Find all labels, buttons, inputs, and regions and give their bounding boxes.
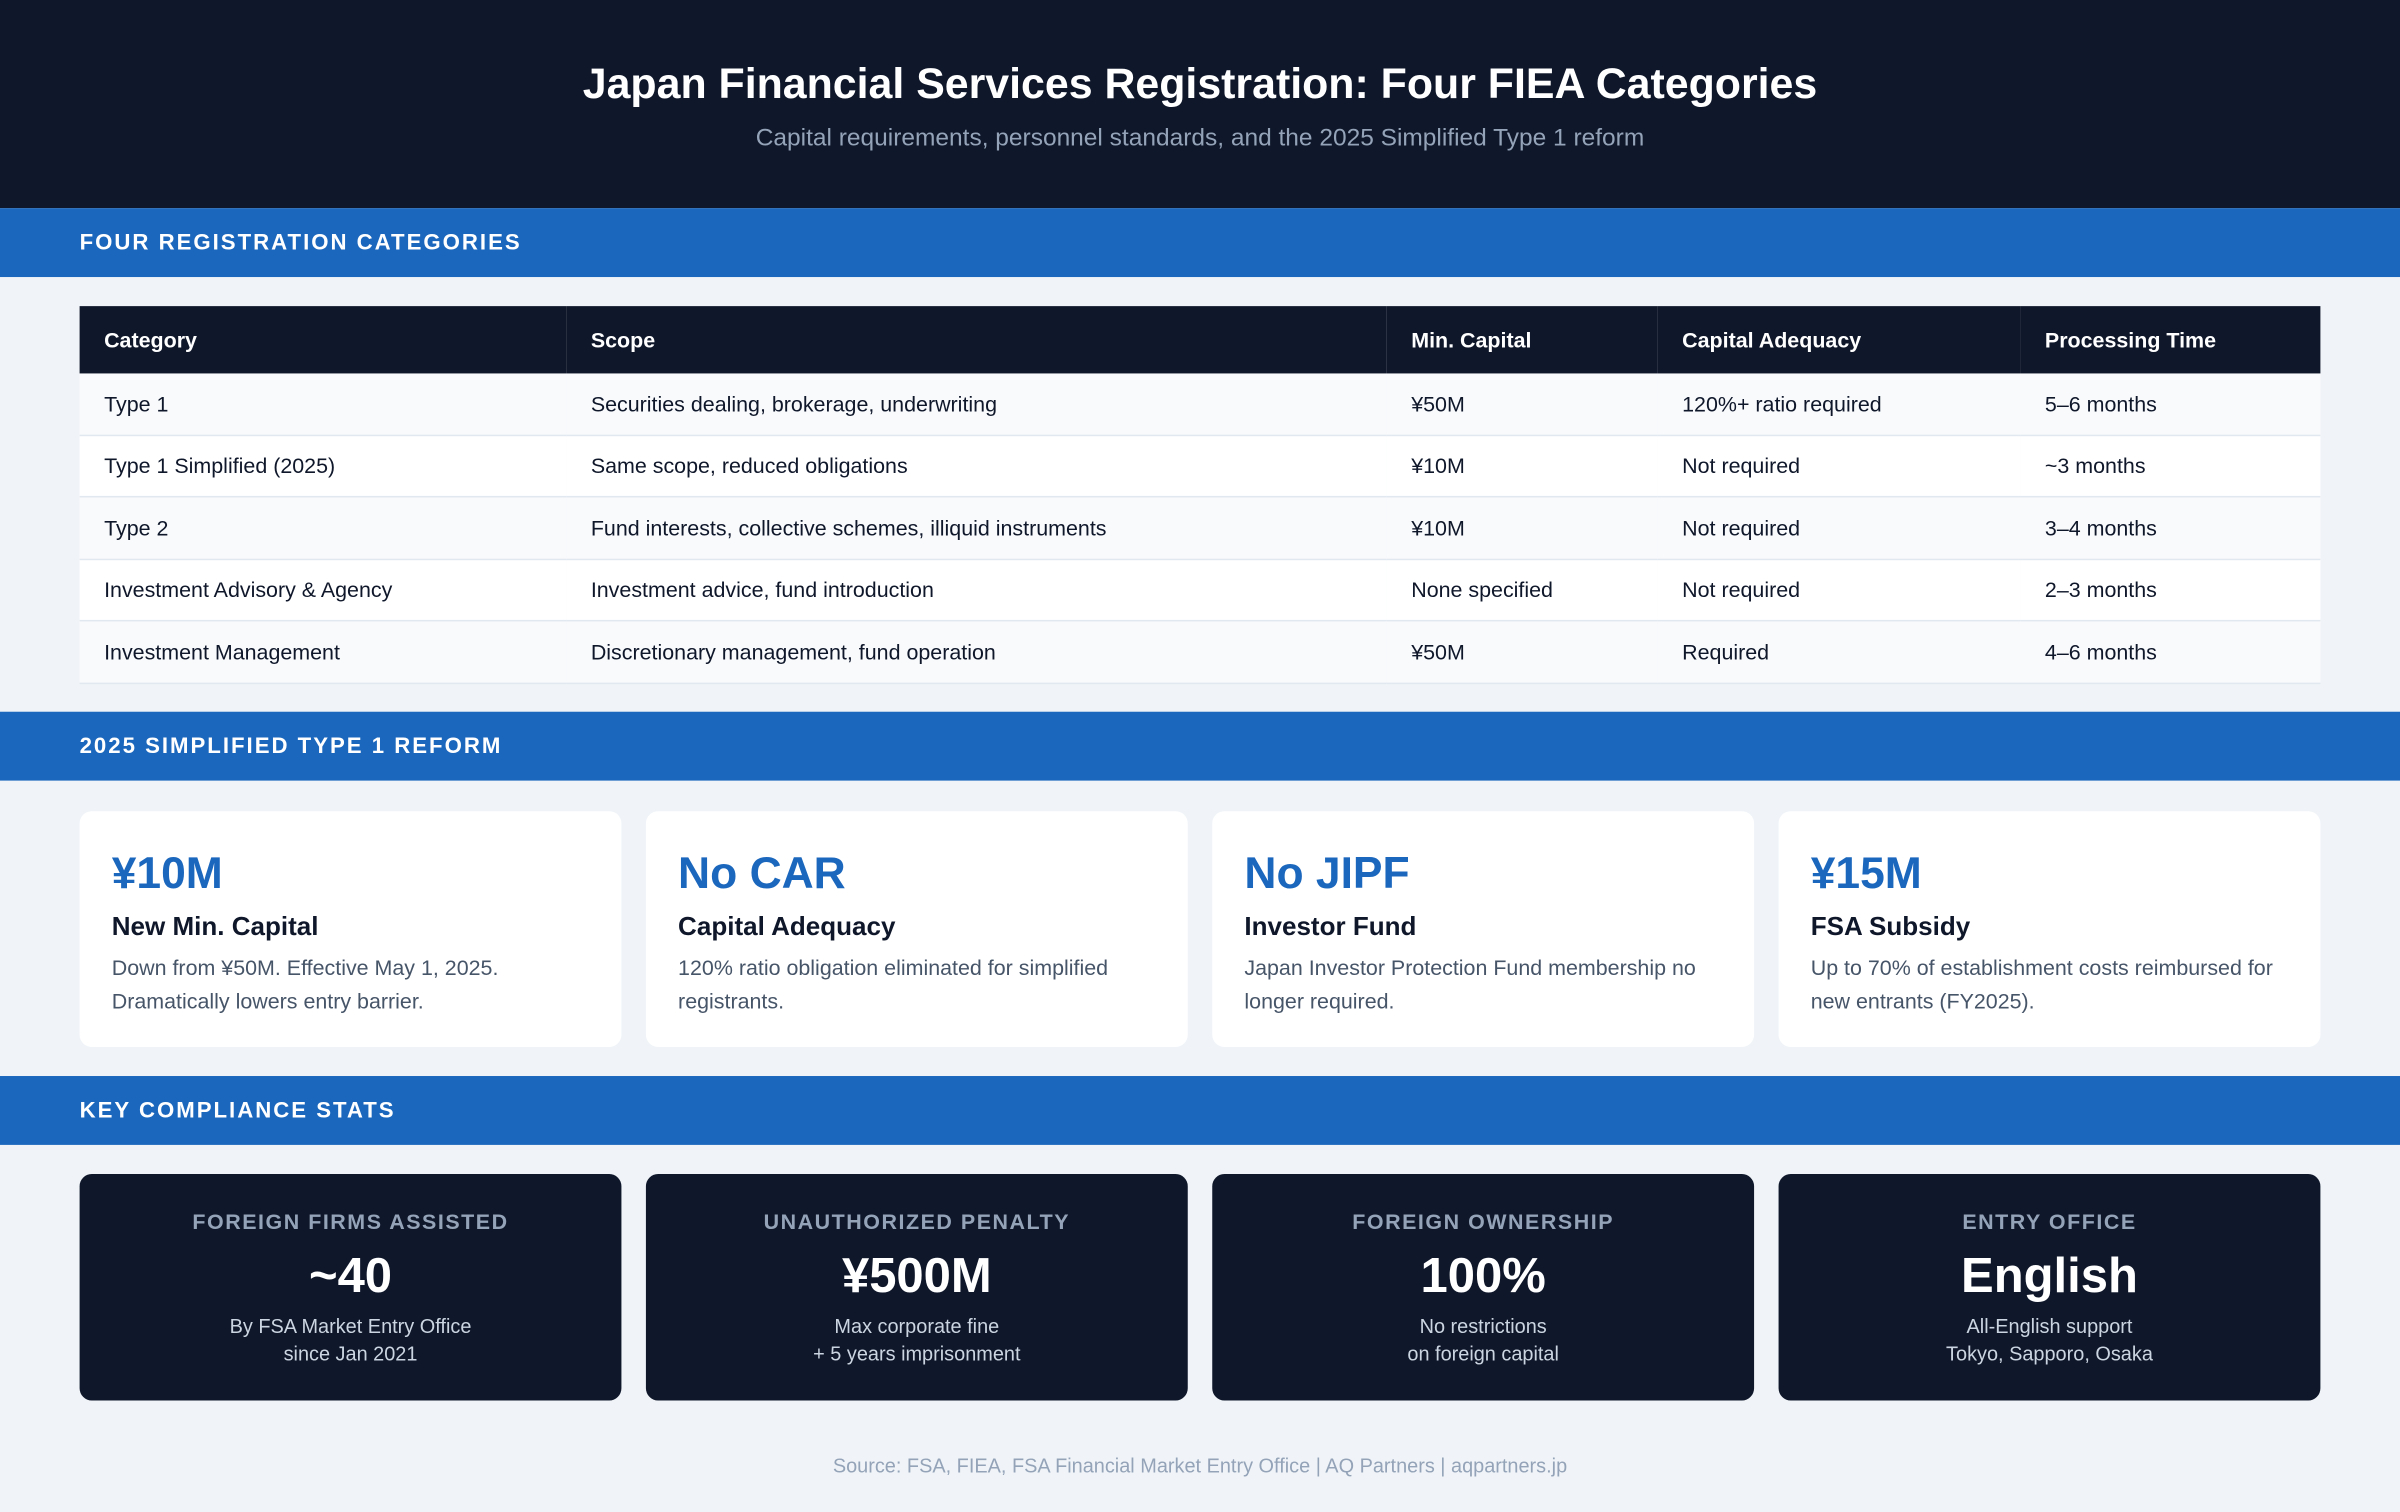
stat: foreign firms: since Jan 2021 xyxy=(284,1342,417,1365)
table: categories: Fund interests, collective schemes, illiquid instruments xyxy=(591,515,1107,540)
table: categories: ¥10M xyxy=(1411,515,1465,540)
table: categories: Processing Time xyxy=(2045,328,2216,352)
table: categories xyxy=(80,306,2320,684)
stat: foreign firms: ~40 xyxy=(309,1247,392,1303)
table: categories: None specified xyxy=(1411,577,1553,602)
section heading: stats xyxy=(0,1076,2400,1145)
section heading: reform: 2025 SIMPLIFIED TYPE 1 REFORM xyxy=(80,735,502,759)
section heading: categories: FOUR REGISTRATION CATEGORIES xyxy=(80,231,522,256)
table: categories: Type 1 Simplified (2025) xyxy=(104,453,335,478)
card: capital adequacy: No CAR xyxy=(678,849,846,898)
table: categories: Investment Advisory & Agency xyxy=(104,577,392,602)
card: FSA subsidy: Up to 70% of establishment costs reimbursed for new entrants (FY2025). xyxy=(1811,955,2273,1013)
table: categories: Investment Management xyxy=(104,639,340,664)
table: categories: Not required xyxy=(1682,577,1800,602)
table: categories: 5–6 months xyxy=(2045,391,2157,416)
card: new min capital: New Min. Capital xyxy=(112,912,318,941)
card: investor fund: Investor Fund xyxy=(1244,912,1416,941)
card: investor fund: No JIPF xyxy=(1244,849,1410,898)
table: categories: Not required xyxy=(1682,515,1800,540)
table: categories: ¥50M xyxy=(1411,391,1465,416)
stat: entry office: All-English support xyxy=(1967,1315,2132,1338)
subtitle: Capital requirements, personnel standards, and the 2025 Simplified Type 1 reform xyxy=(756,126,1644,152)
table: categories: Min. Capital xyxy=(1411,328,1531,352)
footer source: Source: FSA, FIEA, FSA Financial Market Entry Office | AQ Partners | aqpartners.jp xyxy=(833,1454,1567,1477)
table: categories: Not required xyxy=(1682,453,1800,478)
stat: penalty: UNAUTHORIZED PENALTY xyxy=(764,1209,1070,1234)
card: FSA subsidy: ¥15M xyxy=(1811,849,1922,898)
table: categories: Discretionary management, fund operation xyxy=(591,639,996,664)
table: categories: 2–3 months xyxy=(2045,577,2157,602)
stat: penalty: + 5 years imprisonment xyxy=(813,1342,1021,1365)
title: Japan Financial Services Registration: Four FIEA Categories xyxy=(583,60,1817,107)
stat: ownership: 100% xyxy=(1421,1247,1546,1303)
table: categories: Same scope, reduced obligations xyxy=(591,453,908,478)
table: categories: ¥50M xyxy=(1411,639,1465,664)
card: capital adequacy xyxy=(646,811,1188,1047)
table: categories: 120%+ ratio required xyxy=(1682,391,1882,416)
stat: entry office: Tokyo, Sapporo, Osaka xyxy=(1946,1342,2153,1365)
stat: entry office: ENTRY OFFICE xyxy=(1962,1209,2137,1234)
table: categories: ~3 months xyxy=(2045,453,2146,478)
card: FSA subsidy: FSA Subsidy xyxy=(1811,912,1970,941)
card: capital adequacy: Capital Adequacy xyxy=(678,912,895,941)
card: investor fund: Japan Investor Protection Fund membership no longer required. xyxy=(1244,955,1696,1013)
table: categories: ¥10M xyxy=(1411,453,1465,478)
stat: penalty: Max corporate fine xyxy=(834,1315,999,1338)
stat: foreign firms: By FSA Market Entry Office xyxy=(230,1315,471,1338)
section heading: stats: KEY COMPLIANCE STATS xyxy=(80,1099,396,1123)
table: categories: Securities dealing, brokerage, underwriting xyxy=(591,391,997,416)
stat: entry office: English xyxy=(1961,1247,2138,1303)
header xyxy=(0,0,2400,208)
card: new min capital xyxy=(80,811,621,1047)
card: investor fund xyxy=(1212,811,1754,1047)
stat: entry office xyxy=(1779,1174,2320,1401)
stat: penalty: ¥500M xyxy=(842,1247,992,1303)
table: categories: Type 1 xyxy=(104,391,168,416)
table: categories: Type 2 xyxy=(104,515,168,540)
table: categories: 3–4 months xyxy=(2045,515,2157,540)
table: categories: Required xyxy=(1682,639,1769,664)
card: new min capital: ¥10M xyxy=(112,849,223,898)
stat: ownership: No restrictions xyxy=(1420,1315,1547,1338)
card: capital adequacy: 120% ratio obligation eliminated for simplified registrants. xyxy=(678,955,1108,1013)
table: categories: Investment advice, fund introduction xyxy=(591,577,934,602)
section heading: reform xyxy=(0,712,2400,781)
stat: ownership: FOREIGN OWNERSHIP xyxy=(1352,1209,1614,1234)
stat: foreign firms xyxy=(80,1174,621,1401)
stat: ownership: on foreign capital xyxy=(1407,1342,1559,1365)
table: categories: Scope xyxy=(591,328,655,352)
table: categories: Capital Adequacy xyxy=(1682,328,1861,352)
stat: ownership xyxy=(1212,1174,1754,1401)
table: categories: 4–6 months xyxy=(2045,639,2157,664)
stat: foreign firms: FOREIGN FIRMS ASSISTED xyxy=(192,1209,509,1234)
stat: penalty xyxy=(646,1174,1188,1401)
card: new min capital: Down from ¥50M. Effective May 1, 2025. Dramatically lowers entry barrier. xyxy=(112,955,498,1013)
section heading: categories xyxy=(0,208,2400,277)
table: categories: Category xyxy=(104,328,197,352)
card: FSA subsidy xyxy=(1779,811,2320,1047)
